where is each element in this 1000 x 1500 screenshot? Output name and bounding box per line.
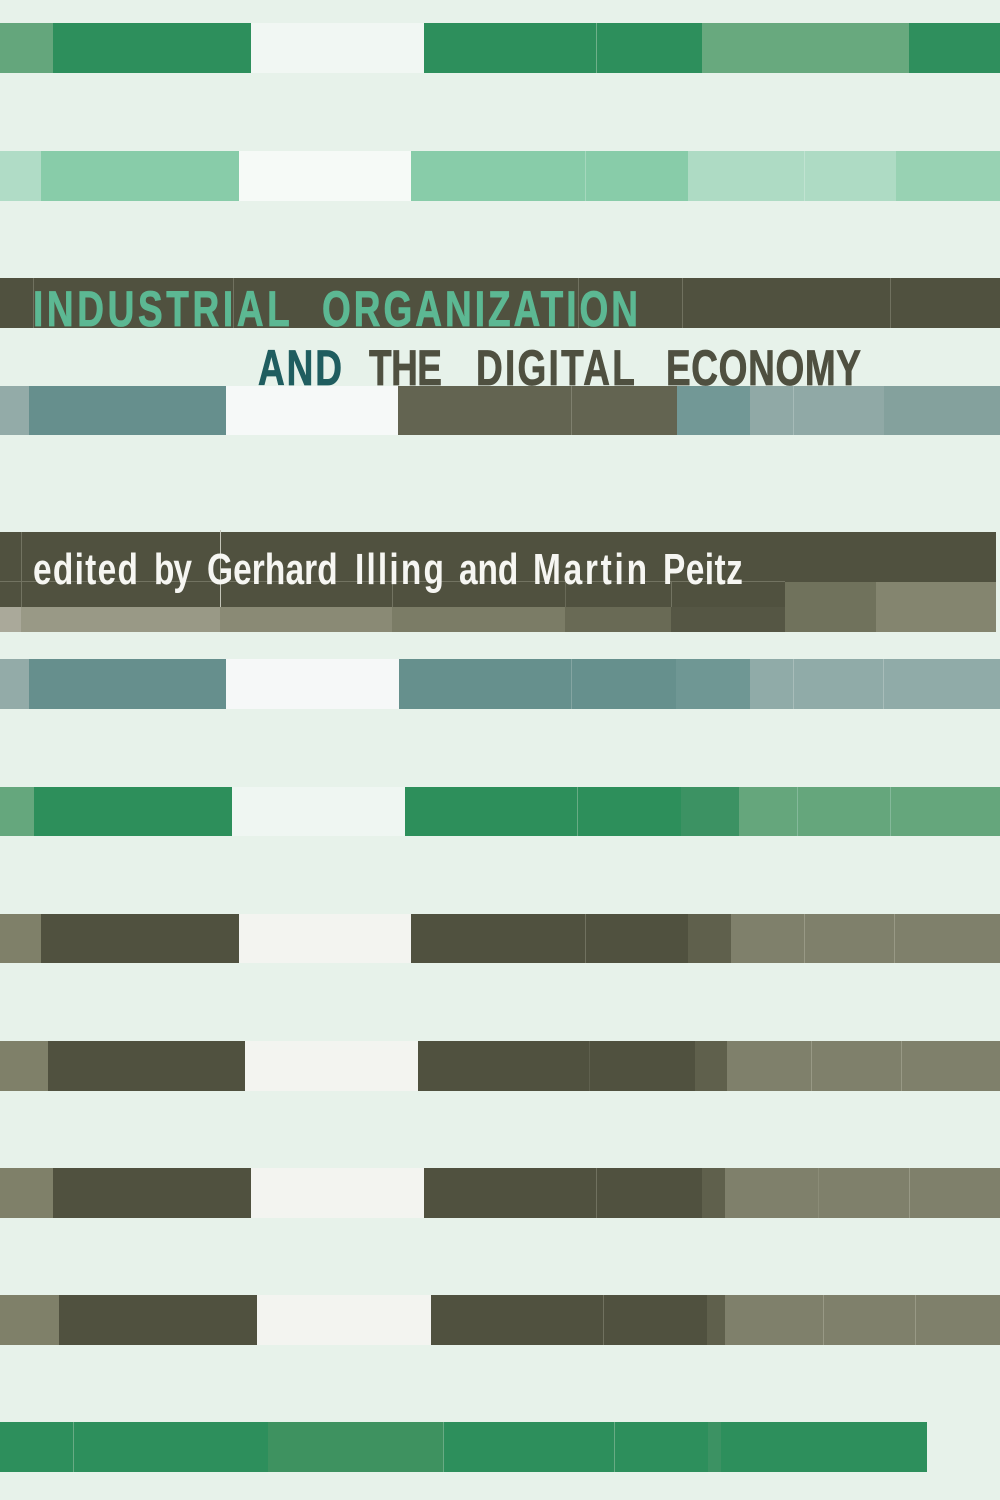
bar row 7: green — [0, 787, 1000, 836]
editors credit: Martin — [533, 546, 647, 594]
bar row 1: green — [0, 23, 1000, 73]
bar row 4: teal and olive — [0, 386, 1000, 435]
bar row 6: teal — [0, 659, 1000, 709]
author band: dark olive stacked block — [0, 530, 996, 632]
title line 2: DIGITAL — [476, 341, 635, 396]
editors credit: Gerhard — [207, 546, 338, 594]
editors credit: edited — [33, 546, 138, 594]
title line 1: INDUSTRIAL — [33, 282, 290, 337]
bar row 3: dark olive title band — [0, 278, 1000, 328]
bar row 11: olive — [0, 1295, 1000, 1345]
title line 1: ORGANIZATION — [322, 282, 638, 337]
editors credit: by — [154, 546, 192, 594]
title line 1 — [33, 282, 638, 337]
bar row 10: olive — [0, 1168, 1000, 1218]
bar row 12: green, ends before right edge — [0, 1422, 927, 1472]
editors credit: Illing — [355, 546, 444, 594]
title line 2 — [258, 341, 861, 396]
editors credit: and — [459, 546, 518, 594]
bar row 9: olive — [0, 1041, 1000, 1091]
bar row 8: olive — [0, 914, 1000, 963]
title line 2: AND — [258, 341, 342, 396]
editors credit: Peitz — [663, 546, 743, 594]
title line 2: ECONOMY — [666, 341, 861, 396]
editors credit — [33, 546, 743, 594]
bar row 2: light green — [0, 151, 1000, 201]
title line 2: THE — [369, 341, 442, 396]
